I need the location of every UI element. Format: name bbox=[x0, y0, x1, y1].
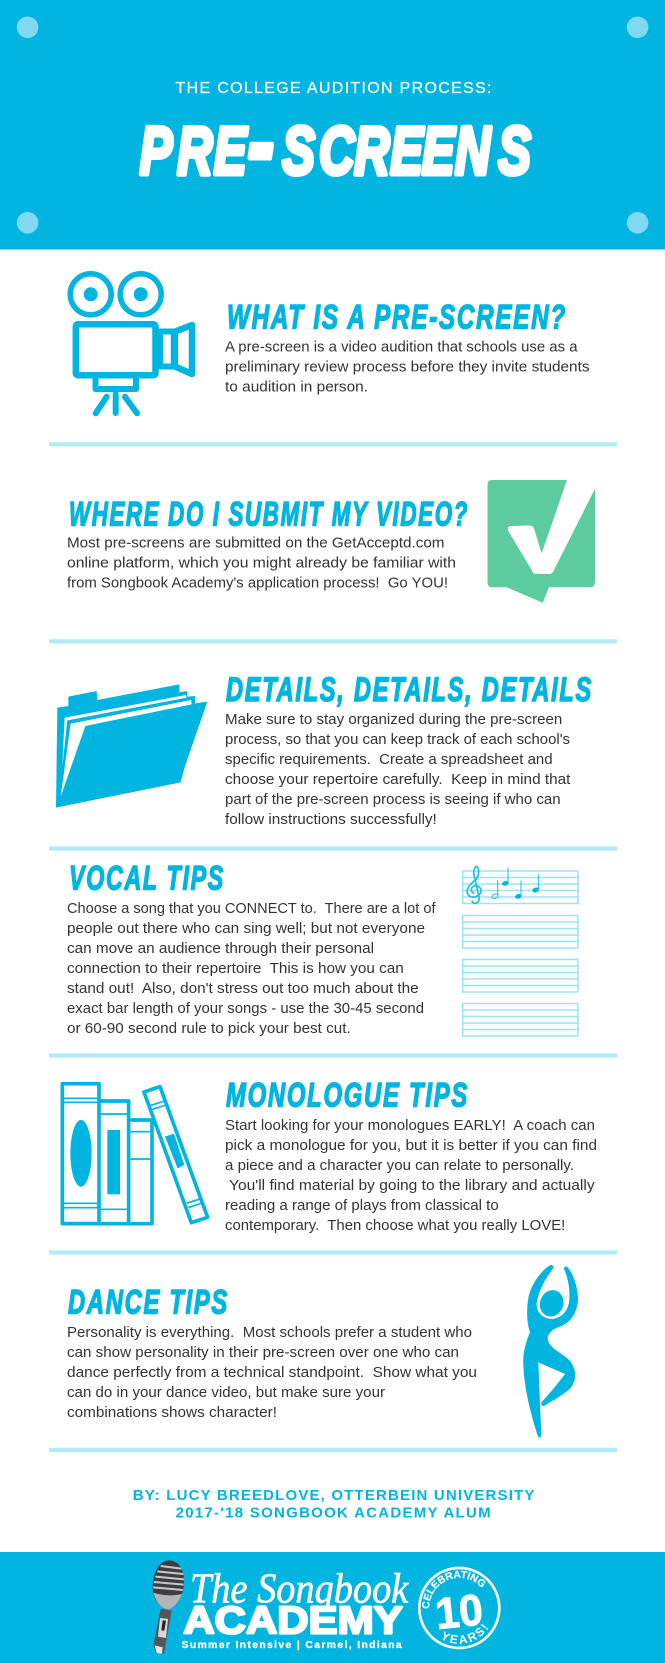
body text: connection to their repertoire This is how you can bbox=[67, 960, 404, 977]
body text: stand out! Also, don't stress out too much about the bbox=[67, 980, 419, 997]
body text bbox=[67, 1324, 477, 1421]
body text: Personality is everything. Most schools prefer a student who bbox=[67, 1324, 472, 1341]
subtitle: THE COLLEGE AUDITION PROCESS: bbox=[176, 80, 492, 97]
body text: A pre-screen is a video audition that schools use as a bbox=[225, 338, 578, 356]
body text bbox=[225, 1117, 597, 1234]
heading: MONOLOGUE TIPS bbox=[226, 1076, 469, 1114]
badge: celebrating 10 years: CELEBRATING bbox=[422, 1570, 486, 1608]
body text: combinations shows character! bbox=[67, 1404, 277, 1421]
body text: specific requirements. Create a spreadsheet and bbox=[225, 751, 553, 768]
title: SCREENS bbox=[282, 112, 531, 189]
heading: WHERE DO I SUBMIT MY VIDEO? bbox=[69, 496, 469, 534]
icon: microphone bbox=[153, 1560, 184, 1654]
logo wordmark: The Songbook bbox=[190, 1566, 409, 1613]
body text: Choose a song that you CONNECT to. There are a lot of bbox=[67, 900, 436, 917]
icon: dancer bbox=[523, 1265, 578, 1438]
body text: can show personality in their pre-screen over one who can bbox=[67, 1344, 459, 1361]
title: PRE bbox=[140, 112, 246, 189]
icon: GetAcceptd check mark bbox=[488, 480, 596, 603]
icon: books bbox=[62, 1084, 208, 1224]
heading: VOCAL TIPS bbox=[69, 860, 225, 898]
panel: vocal tips bbox=[67, 860, 578, 1037]
body text: Make sure to stay organized during the pre-screen bbox=[225, 711, 562, 728]
body text: online platform, which you might already be familiar with bbox=[67, 554, 456, 572]
credit line: 2017-'18 SONGBOOK ACADEMY ALUM bbox=[176, 1505, 491, 1522]
icon: folder bbox=[56, 684, 207, 808]
body text: or 60-90 second rule to pick your best cut. bbox=[67, 1020, 351, 1037]
body text: people out there who can sing well; but not everyone bbox=[67, 920, 425, 937]
panel: details bbox=[56, 671, 593, 828]
credit line: BY: LUCY BREEDLOVE, OTTERBEIN UNIVERSITY bbox=[133, 1487, 534, 1504]
title: - bbox=[247, 78, 275, 206]
badge: celebrating 10 years bbox=[418, 1566, 501, 1650]
body text: can move an audience through their personal bbox=[67, 940, 374, 957]
corner dots bbox=[17, 16, 648, 234]
body text: pick a monologue for you, but it is better if you can find bbox=[225, 1137, 597, 1154]
header banner bbox=[0, 0, 665, 250]
heading: DANCE TIPS bbox=[68, 1284, 229, 1322]
body text: reading a range of plays from classical to bbox=[225, 1197, 499, 1214]
body text: process, so that you can keep track of each school's bbox=[225, 731, 570, 748]
icon: music staves bbox=[463, 867, 578, 1036]
credit line bbox=[133, 1487, 534, 1522]
logo: ACADEMY bbox=[183, 1600, 403, 1643]
panel: where do I submit bbox=[67, 480, 596, 603]
body text bbox=[225, 338, 590, 396]
icon: film camera bbox=[70, 274, 192, 413]
body text: You'll find material by going to the library and actually bbox=[229, 1177, 595, 1194]
body text: Start looking for your monologues EARLY! A coach can bbox=[225, 1117, 595, 1134]
body text: follow instructions successfully! bbox=[225, 811, 437, 828]
body text: preliminary review process before they invite students bbox=[225, 358, 590, 376]
body text: to audition in person. bbox=[225, 378, 368, 396]
body text: contemporary. Then choose what you really LOVE! bbox=[225, 1217, 565, 1234]
panel: monologue tips bbox=[62, 1076, 597, 1234]
panel: dance tips bbox=[67, 1265, 578, 1438]
body text bbox=[67, 534, 456, 592]
body text: dance perfectly from a technical standpoint. Show what you bbox=[67, 1364, 477, 1381]
body text: choose your repertoire carefully. Keep in mind that bbox=[225, 771, 571, 788]
badge: celebrating 10 years: 10 bbox=[433, 1585, 485, 1639]
icon: treble clef and notes bbox=[467, 867, 540, 903]
body text: part of the pre-screen process is seeing if who can bbox=[225, 791, 561, 808]
body text bbox=[225, 711, 571, 828]
badge: celebrating 10 years: YEARS! bbox=[443, 1624, 488, 1644]
panel: what is a pre-screen bbox=[70, 274, 589, 413]
footer banner bbox=[0, 1552, 665, 1663]
body text: from Songbook Academy's application process! Go YOU! bbox=[67, 574, 448, 592]
body text bbox=[67, 900, 436, 1037]
logo: Summer Intensive | Carmel, Indiana bbox=[182, 1640, 402, 1651]
body text: exact bar length of your songs - use the 30-45 second bbox=[67, 1000, 424, 1017]
body text: can do in your dance video, but make sure your bbox=[67, 1384, 385, 1401]
body text: Most pre-screens are submitted on the GetAcceptd.com bbox=[67, 534, 444, 552]
logo bbox=[152, 1560, 501, 1654]
body text: a piece and a character you can relate to personally. bbox=[225, 1157, 574, 1174]
